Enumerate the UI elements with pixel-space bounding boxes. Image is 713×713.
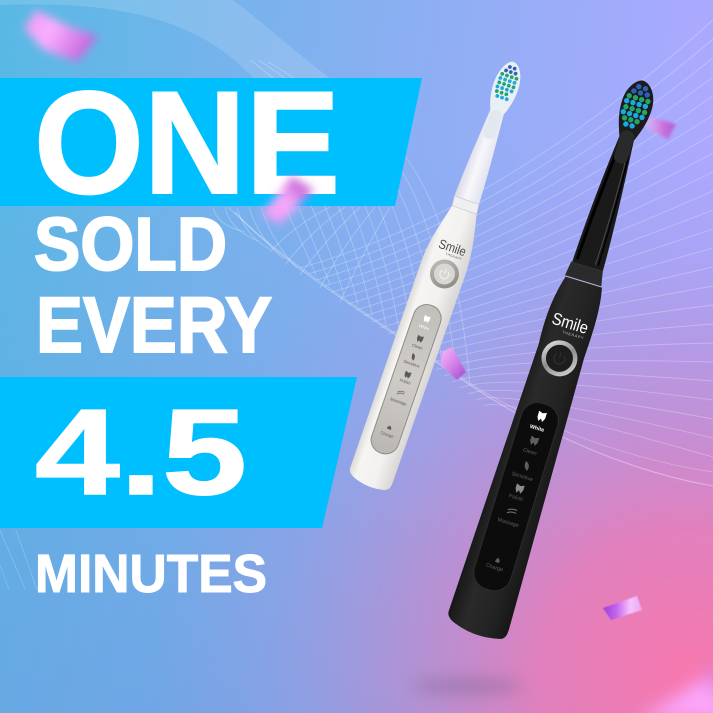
mode labels: Massage	[497, 517, 519, 529]
white brush power button	[426, 256, 463, 292]
white brush handle	[346, 202, 485, 494]
floor shadow	[411, 678, 523, 694]
confetti: behind white brush	[441, 347, 466, 380]
mode labels: Polish	[508, 493, 524, 503]
mode labels	[378, 313, 437, 440]
headline: one: ONE	[34, 61, 340, 224]
white brush collar	[451, 196, 480, 214]
white toothbrush	[346, 55, 536, 494]
white brush bristles: blue	[504, 64, 519, 76]
headline: minutes: MINUTES	[35, 544, 267, 604]
banner: one	[0, 78, 422, 206]
black toothbrush	[444, 72, 674, 643]
mode labels: Massage	[390, 396, 408, 407]
mode labels: Charge	[485, 562, 504, 573]
black brush neck highlights	[577, 142, 634, 266]
black brush bristles: blue	[631, 82, 652, 98]
white brush logo: THERAPY	[445, 252, 462, 261]
wave mesh lines	[0, 20, 713, 590]
confetti: lower right	[603, 596, 642, 620]
mode labels: White	[418, 323, 431, 332]
mode labels: White	[529, 424, 545, 434]
confetti: over banner	[262, 176, 314, 224]
banner: 4.5	[0, 377, 357, 528]
white brush bristles: cyan	[492, 76, 517, 102]
black brush bristles: cyan	[617, 97, 649, 131]
black brush neck	[572, 128, 644, 271]
black brush collar trim	[565, 276, 602, 287]
white brush mode panel	[367, 301, 445, 458]
mode labels: Charge	[380, 430, 395, 439]
white brush neck highlight	[482, 108, 503, 141]
black brush head	[611, 76, 659, 147]
mode labels: Sensitive	[403, 358, 421, 369]
black brush neck cap	[612, 129, 636, 165]
black brush mode panel	[470, 398, 563, 595]
mode labels: Clean	[522, 447, 537, 457]
black brush handle	[444, 272, 612, 643]
headline: every: EVERY	[36, 280, 272, 369]
mode labels: Polish	[399, 377, 412, 386]
black brush logo: THERAPY	[562, 330, 584, 341]
mode labels: Clean	[411, 342, 424, 351]
black brush logo: Smile	[550, 309, 591, 338]
confetti: behind black brush	[645, 116, 676, 139]
headline: 4.5: 4.5	[35, 384, 247, 520]
white brush bristles: green	[494, 71, 519, 98]
confetti: bottom right corner	[636, 668, 713, 713]
white brush head	[484, 58, 526, 118]
headline: sold: SOLD	[34, 202, 227, 286]
black brush collar	[565, 261, 606, 286]
mode labels	[483, 408, 553, 574]
white brush logo: Smile	[437, 236, 468, 259]
white brush neck	[454, 106, 510, 205]
confetti: top left	[24, 10, 98, 62]
mode labels: Sensitive	[511, 471, 533, 483]
light ribbon top left	[0, 0, 330, 78]
black brush power button	[537, 336, 582, 381]
black brush bristles: green	[619, 92, 651, 126]
